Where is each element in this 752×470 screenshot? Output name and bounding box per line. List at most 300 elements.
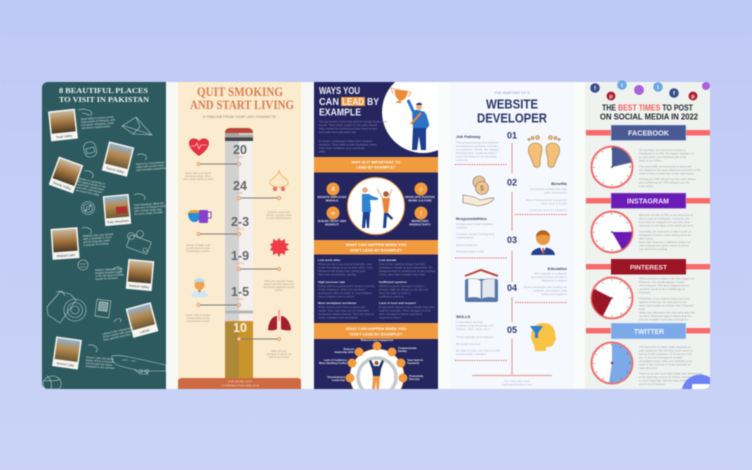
- text: skills: Think logically and critically: [456, 335, 494, 339]
- benefit labels: DEVELOPS POSITIVE: [405, 195, 435, 199]
- text: pinterest: on them, Pinterest says it means that the: [639, 314, 692, 318]
- icon: open book: [465, 270, 498, 302]
- icon: tent: [122, 117, 152, 135]
- text: place descriptions: Attabad Lake was formed: [83, 232, 114, 238]
- social icons row: p: [691, 94, 695, 100]
- section numbers: 04: [507, 283, 517, 293]
- icon: businessman: [531, 230, 555, 255]
- footer text: startingwithfuture.com: [502, 382, 533, 386]
- consequences text: they lose productivity quickly.: [318, 272, 357, 276]
- text: place descriptions: is popular for boating: [83, 241, 109, 247]
- text: benefits: Constantly collaborate with: [530, 187, 567, 191]
- text: pinterest: when your audience checks their Pinterest: [639, 304, 694, 308]
- text: education: The majority of software: [534, 272, 567, 276]
- white circle hero: [381, 81, 439, 154]
- consequences text: Low work ethic: [318, 258, 341, 262]
- decorative curls: [78, 109, 147, 352]
- consequences text: One of the saddest things that kills: [379, 262, 425, 266]
- benefit labels: WORK CULTURE: [408, 198, 432, 202]
- title: quit smoking: AND START LIVING: [190, 97, 294, 112]
- text: place descriptions: valley with ancient forts: [136, 163, 165, 169]
- text: facebook: to post when your followers are most: [639, 155, 686, 159]
- photo: Neelum Valley: [126, 259, 154, 291]
- icon: footprints: [528, 136, 560, 167]
- text: twitter: early in the morning (7-9 am) and late at: [639, 362, 691, 366]
- consequences text: employees who consider to your leaders: [318, 291, 372, 295]
- photo: Attabad Lake: Attabad Lake: [56, 253, 76, 258]
- text: skills: [456, 314, 500, 356]
- consequences text: they can start to work in: [379, 291, 411, 295]
- text: benefits timeline: your body starts to heal: [183, 177, 213, 181]
- text: responsibilities: maintenance: [456, 236, 474, 240]
- icon: head with funnel: [530, 323, 556, 351]
- timeline numbers: 2-3: [231, 215, 249, 229]
- title: 8 beautiful places: TO VISIT IN PAKISTAN: [59, 95, 150, 104]
- text: instagram: you should be posting: [639, 247, 668, 251]
- consequences text: Low morale: [379, 258, 396, 262]
- text: benefits: than most 9-5 jobs: [542, 202, 567, 206]
- icon: hand and coin: $: [480, 186, 484, 192]
- panel: quit smoking: [166, 82, 314, 389]
- text: responsibilities: systems: [456, 226, 468, 230]
- text: benefits timeline: nonsmoker's level: [186, 319, 210, 323]
- text: responsibilities: Solve problems: [456, 243, 478, 247]
- text: twitter: pick at 9 AM in Eastern, 8-12 am and 3-4: [639, 352, 692, 356]
- photo: Swat Valley: [48, 109, 78, 141]
- text: place descriptions: Fairy Meadows offers the: [134, 201, 165, 207]
- icon: splat: [270, 238, 289, 257]
- text: pinterest: When you ultimately can view pins and click: [639, 310, 696, 314]
- text: place descriptions: Naran and is a favourite: [86, 358, 115, 364]
- section numbers: 05: [507, 325, 517, 335]
- title: 8 beautiful places: 8 BEAUTIFUL PLACES: [59, 86, 148, 95]
- photo: Neelum Valley: Neelum Valley: [129, 284, 150, 289]
- icon: small picture: [95, 299, 111, 318]
- text: benefits timeline: pressure drop, often: [185, 174, 211, 178]
- text: facebook: [639, 148, 701, 188]
- text: benefits timeline: Carbon monoxide: [268, 210, 291, 214]
- text: benefits timeline: breathing is easier: [186, 249, 210, 253]
- consequences text: Employees cannot trust a leader that can't: [379, 305, 435, 309]
- social icons row: p: [609, 94, 613, 100]
- text: responsibilities: Responsibilities: [456, 216, 487, 221]
- text: benefits timeline: Sense of taste and: [186, 243, 210, 247]
- text: responsibilities: Design and install software: [456, 222, 493, 226]
- text: facebook: Facebook is 12 PM. For higher visibility, try: [639, 152, 694, 156]
- chart: ring of consequences: Leadership: [332, 379, 345, 382]
- photo: Ansoor Lake: [52, 336, 82, 370]
- text: responsibilities: Review broken code: [456, 250, 484, 254]
- icon: camera: [47, 291, 86, 323]
- consequences text: inefficient systems.: [379, 294, 404, 298]
- text: benefits timeline: attack greatly improves: [264, 282, 294, 286]
- panel: best times to post: [584, 82, 711, 390]
- consequences text: respond to them.: [379, 316, 402, 320]
- text: benefits timeline: Lower risk of stroke: [185, 313, 211, 317]
- chart: ring of consequences: Identity: [398, 350, 407, 353]
- title: ways you can lead: WAYS YOU: [319, 85, 360, 97]
- text: place descriptions: shaped forested region: [95, 270, 123, 275]
- text: skills: Understand several: [456, 320, 483, 324]
- text: education: developers have at least a: [531, 275, 567, 279]
- photo: Hunza Valley: Hunza Valley: [106, 166, 125, 174]
- intro paragraph: [319, 120, 388, 154]
- timeline numbers: 10: [233, 321, 247, 335]
- chart: ring of consequences: Reduced team engagement: [361, 339, 393, 342]
- text: instagram: Between 10 AM-12 PM, is the best time of: [639, 213, 693, 217]
- consequences text: What you don't set a good example, one: [318, 262, 372, 266]
- timeline numbers: 24: [233, 179, 247, 193]
- intro paragraph: and walk their talk each day: [319, 130, 357, 134]
- band: why is it important: WHY IS IT IMPORTANT TO: [352, 160, 400, 164]
- timeline numbers: 20: [233, 143, 247, 157]
- footer bar: YOURWEALTHGUIDE.COM: [221, 384, 260, 388]
- title: website developer: DEVELOPER: [477, 110, 548, 126]
- text: benefits: More interpersonal interaction: [526, 198, 567, 202]
- text: instagram: [639, 213, 694, 251]
- chart: ring of consequences: When Handling Conflict: [319, 362, 347, 365]
- consequences text: More workplace accidents: [318, 301, 357, 305]
- text: skills: and find little mistakes: [456, 352, 487, 356]
- section numbers: 03: [507, 235, 517, 245]
- timeline spine: [472, 143, 552, 376]
- band: what can happen: WHAT CAN HAPPEN WHEN YOU: [346, 242, 406, 247]
- timeline numbers: (YRS): [236, 297, 244, 301]
- photo: Skardu Valley: Skardu Valley: [52, 181, 72, 191]
- photo: Attabad Lake: [50, 227, 80, 260]
- footer text: [502, 379, 533, 386]
- text: place descriptions: meadows in the summer: [85, 364, 115, 370]
- photo: Fairy Meadows: Fairy Meadows: [107, 218, 129, 224]
- text: job pathway: development pathway includes: [456, 144, 499, 148]
- icon: hand and coin: [463, 176, 494, 206]
- cigarette: [225, 128, 253, 388]
- band: what can happen: DON'T LEAD BY EXAMPLE?: [350, 248, 403, 252]
- text: instagram: Generally, the best time of day to post on: [639, 230, 692, 234]
- title: best times: THE BEST TIMES TO POST: [602, 104, 693, 112]
- consequences text: Lack of trust and respect: [379, 301, 416, 305]
- text: twitter: in mind, Saturday has the least activity: [639, 378, 689, 382]
- dotted dividers: [455, 164, 567, 360]
- text: benefits timeline: Risk of a sudden heart: [265, 279, 294, 283]
- text: place descriptions: and its turquoise water: [83, 238, 110, 244]
- title: website developer: [477, 91, 548, 126]
- text: pinterest: appear at the top, the best pins to pin: [639, 300, 687, 304]
- text: job pathway: Job Pathway: [456, 134, 481, 139]
- photo: Fairy Meadows: [103, 194, 131, 226]
- text: place descriptions: Ansoor Lake sits above: [86, 355, 115, 361]
- circle: two people: [348, 178, 404, 234]
- text: pinterest: first pin wouldn't work early enough for: [639, 318, 688, 322]
- band: what can happen 2: [314, 323, 438, 339]
- text: instagram: after hours.: [639, 236, 654, 240]
- intro paragraph: from their mistakes, and contribute: [319, 146, 365, 150]
- timeline numbers: 1-5: [231, 285, 249, 299]
- text: benefits: other developers: [544, 190, 567, 194]
- text: benefits timeline: half of a smoker: [269, 355, 289, 359]
- photo: Ansoor Lake: Ansoor Lake: [56, 361, 75, 368]
- text: responsibilities: Conduct system testing and: [456, 232, 494, 236]
- text: pinterest: [639, 276, 696, 322]
- text: place descriptions: trek through the alpine: [86, 361, 113, 367]
- header: twitter: [586, 323, 710, 339]
- social icons row: t: [621, 83, 623, 89]
- icon: airplane: [112, 355, 166, 374]
- text: place descriptions: Skardu is a gateway to: [78, 176, 106, 186]
- chart: ring of consequences: Overshadowed: [327, 376, 345, 379]
- benefit icons: ∞: [331, 211, 335, 217]
- band: why is it important: LEAD BY EXAMPLE?: [356, 164, 396, 170]
- text: responsibilities: [456, 216, 494, 254]
- text: twitter: There is no one most right single day. Wednesday: [639, 372, 704, 376]
- text: place descriptions: and snow capped peaks: [81, 124, 111, 130]
- text: benefits: [526, 181, 568, 212]
- chart: ring of consequences: Lack of Confidence: [324, 359, 348, 362]
- icon: nose: [270, 170, 288, 191]
- icon: backpack: [82, 141, 98, 158]
- text: skills: programming languages (C,: [456, 324, 494, 328]
- text: twitter: pm. If you are tweeting for a wider: [639, 356, 683, 360]
- text: facebook: Posting at 3 PM will get you the most shares: [639, 177, 696, 181]
- consequences text: people might do things on the fly and: [379, 288, 428, 292]
- text: twitter: The best time to tweet really depends on: [639, 345, 691, 349]
- social icons row: [590, 80, 710, 100]
- title: quit smoking: [190, 84, 294, 112]
- icon: bowl and cup: [188, 210, 211, 223]
- text: place descriptions: in the Himalaya foothills: [95, 272, 124, 278]
- footer bar: [178, 378, 301, 389]
- title: quit smoking: QUIT SMOKING: [197, 84, 283, 99]
- icon: man holding trophy: [391, 88, 428, 150]
- text: place descriptions: world with crystal lakes: [77, 182, 105, 192]
- photo: Swat Valley: Swat Valley: [56, 134, 73, 139]
- text: education: Education: [548, 266, 568, 271]
- timeline numbers: (WKS): [236, 227, 244, 231]
- benefit labels: BOOSTS EMPLOYEE: [317, 195, 347, 199]
- intro paragraph: In return, employees follow their leaders': [319, 139, 373, 143]
- text: benefits timeline: Risk of lung: [271, 349, 287, 353]
- text: place descriptions: best view of Nanga Parbat: [134, 204, 166, 210]
- text: benefits timeline: and lung capacity grows: [263, 285, 295, 289]
- text: benefits timeline: further: [275, 288, 283, 292]
- text: job pathway: and maintenance of computer: [456, 154, 497, 158]
- text: place descriptions: after a landslide in 2010: [83, 235, 112, 241]
- consequences text: [318, 258, 435, 320]
- title: 8 beautiful places: [59, 86, 150, 104]
- text: place descriptions: Neelum Valley is a bow: [95, 267, 123, 272]
- text: benefits timeline: comparable to the: [186, 316, 210, 320]
- band: what can happen 2: DON'T LEAD BY EXAMPLE?: [350, 332, 403, 336]
- benefit icons: !: [420, 212, 422, 218]
- consequences text: Without a good manager's system,: [379, 284, 425, 288]
- chart: ring of consequences: Team Spirit &: [407, 359, 423, 362]
- text: twitter: [639, 345, 704, 386]
- photo: Lahore: Lahore: [140, 328, 151, 334]
- section numbers: 02: [507, 178, 517, 188]
- text: skills: Be detail oriented: [456, 342, 480, 346]
- icon: doctor: [191, 278, 208, 297]
- clock: twitter: [592, 342, 632, 384]
- text: facebook: The post traffic on Facebook is observed: [639, 164, 692, 168]
- text: place descriptions: the highest peaks in the: [77, 179, 107, 189]
- clock: pinterest: [592, 278, 632, 318]
- clock: facebook: [592, 146, 632, 188]
- text: twitter: geographic base, plan your activities post: [639, 359, 692, 363]
- consequences text: have a higher rate to churn.: [318, 294, 355, 298]
- text: instagram: day to post on Instagram. However, the: [639, 216, 690, 220]
- footer bar: FOR MORE VISIT: [228, 380, 252, 384]
- text: place descriptions: of the country with great: [102, 329, 132, 339]
- text: benefits timeline: drops, oxygen rises: [266, 213, 292, 217]
- text: job pathway: The programming and software: [456, 140, 499, 144]
- chart: ring of consequences: Diversity: [409, 378, 420, 381]
- photo: Lahore: [126, 302, 158, 338]
- text: twitter: is the best day to post on Twitter, keeping: [639, 375, 692, 379]
- text: place descriptions: [76, 115, 167, 370]
- text: place descriptions: for every single traveller: [134, 210, 163, 216]
- header: facebook: FACEBOOK: [628, 128, 670, 138]
- consequences text: followers will slowly stop caring and: [318, 269, 366, 273]
- intro paragraph: daily.: [319, 150, 326, 154]
- chart: ring of consequences: Compassionate: [398, 347, 417, 350]
- text: pinterest: Therefore, if you want to have your pins: [639, 296, 690, 300]
- section numbers: [507, 130, 517, 335]
- footer text: For more tips refer: [504, 379, 530, 383]
- header: twitter: TWITTER: [634, 329, 664, 336]
- text: job pathway: occupations. Fields, the design,: [456, 148, 499, 152]
- title: ways you can lead: [319, 85, 379, 118]
- band: why is it important: [314, 157, 438, 172]
- consequences text: When teams don't have a good role: [318, 305, 366, 309]
- chart: ring of consequences: Productivity: [409, 375, 424, 378]
- text: education: Most companies are looking for: [524, 285, 567, 289]
- timeline numbers: 1-9: [231, 249, 249, 263]
- consequences text: Doing well as a good team means a sense: [318, 284, 375, 288]
- text: twitter: and is not of interest.: [639, 382, 666, 386]
- band: what can happen 2: WHAT CAN HAPPEN WHEN YOU: [346, 326, 406, 331]
- panel: lead by example: [313, 81, 439, 390]
- text: place descriptions: Hunza is a mountainous: [136, 160, 165, 166]
- header: facebook: [586, 125, 710, 140]
- consequences text: High turnover rate: [318, 280, 345, 284]
- consequences text: model, they may lose out on important: [318, 308, 369, 312]
- text: pinterest: feed.: [639, 307, 646, 311]
- text: job pathway: [456, 134, 499, 162]
- text: pinterest: Pinterest, the results appear mostly: [639, 280, 685, 284]
- subtitle: A TIMELINE FROM YOUR LAST CIGARETTE: [203, 115, 276, 119]
- title: ways you can lead: CAN: [319, 96, 339, 108]
- header: instagram: [586, 193, 710, 208]
- text: skills: SKILLS: [456, 314, 471, 319]
- text: instagram: Instagram is before work during lunch or: [639, 233, 691, 237]
- text: place descriptions: and orchards everywhere: [136, 166, 167, 172]
- benefit labels: [317, 195, 435, 226]
- band: what can happen: [314, 240, 438, 254]
- title: ways you can lead: EXAMPLE: [319, 106, 361, 118]
- consequences text: of fair treatment, when it's not there,: [318, 288, 366, 292]
- consequences text: if they don't see a leader they trust.: [379, 272, 426, 276]
- header: instagram: INSTAGRAM: [627, 198, 669, 206]
- text: pinterest: chronological. The app's biggest server: [639, 284, 689, 288]
- panel: website developer: [438, 82, 585, 389]
- consequences text: workplace morale is poor leadership. It's: [379, 266, 433, 270]
- icon: heart: [189, 139, 209, 156]
- icon: suitcase: [126, 235, 151, 254]
- benefit icons: [326, 182, 428, 220]
- timeline numbers: [231, 143, 249, 335]
- icon: coin badge: [78, 260, 88, 270]
- text: place descriptions: and wide cold deserts: [76, 185, 103, 194]
- benefit labels: PRODUCTIVITY: [409, 222, 431, 226]
- text: job pathway: systems.: [456, 158, 468, 162]
- text: benefits: Benefits: [551, 181, 568, 186]
- consequences text: workplace safety training. This can lead to: [318, 312, 374, 316]
- timeline numbers: (HR): [237, 191, 243, 195]
- text: benefits timeline: [183, 171, 295, 359]
- text: skills: Python, SQL, Java, etc.): [456, 327, 490, 331]
- text: benefits timeline: disease is about as: [267, 352, 292, 356]
- title: ways you can lead: BY: [367, 96, 379, 108]
- benefit labels: RESPECT: [325, 222, 339, 226]
- title: best times: [600, 104, 699, 122]
- text: twitter: your audience. But the best times seem to: [639, 348, 693, 352]
- photo: Skardu Valley: [49, 156, 83, 194]
- timeline connectors: [197, 162, 280, 340]
- icon: lungs: [268, 310, 291, 330]
- text: facebook: the highest in the early afternoon between 1 PM: [639, 168, 701, 172]
- text: place descriptions: Switzerland of Pakistan, with: [81, 118, 116, 124]
- text: place descriptions: all around the valley: [76, 188, 100, 197]
- consequences text: lead by example. They struggle to trust: [379, 308, 431, 312]
- text: pinterest: Pinterest.: [639, 290, 651, 294]
- icon: compass: [82, 202, 94, 214]
- text: benefits timeline: smell improve and: [186, 246, 210, 250]
- text: place descriptions: known for its rivers: [95, 276, 119, 281]
- header: pinterest: [586, 259, 710, 274]
- text: instagram: best time for engagement can also vary: [639, 220, 690, 224]
- chart: ring of consequences: Reduced: [343, 348, 354, 351]
- panel: Pakistan places: [42, 82, 167, 389]
- text: education: software developers with: [533, 288, 567, 292]
- header: pinterest: PINTEREST: [630, 264, 668, 272]
- social icons row: f: [673, 91, 675, 97]
- text: skills: Be able to look over lots of code: [456, 348, 500, 352]
- text: instagram: depends on the days of the week you post.: [639, 224, 694, 228]
- intro paragraph: Strong leaders know that actions speak louder than: [319, 120, 388, 124]
- text: instagram: Each day observes a different pattern of: [639, 240, 690, 244]
- title: ways you can lead: LEAD: [342, 96, 364, 108]
- consequences text: costly mistakes and accidents.: [318, 316, 359, 320]
- text: benefits: Continual need for creativity: [529, 208, 567, 212]
- text: facebook: likely to go online.: [639, 158, 662, 162]
- text: place descriptions: food, gardens and forts: [103, 332, 132, 342]
- benefit labels: INCREASES: [412, 219, 428, 223]
- chart: ring of consequences: Teamwork: [407, 362, 420, 365]
- clock: instagram: [592, 212, 632, 252]
- icon: binoculars: [128, 230, 144, 240]
- chart: ring of consequences: [318, 338, 424, 390]
- text: benefits timeline: in your bloodstream: [266, 216, 292, 220]
- text: place descriptions: Lahore is the cultural heart: [102, 325, 134, 336]
- title: best times: ON SOCIAL MEDIA IN 2022: [600, 112, 699, 122]
- benefit icons: 4: [331, 187, 335, 193]
- text: facebook: On average, the best time to post on: [639, 148, 686, 152]
- text: job pathway: development, implementation: [456, 151, 497, 155]
- icon: beach ball: [43, 376, 61, 389]
- benefit icons: ☺: [418, 187, 424, 193]
- social icons row: t: [657, 85, 659, 91]
- text: facebook: while a drop is noted late in the night hours.: [639, 172, 695, 176]
